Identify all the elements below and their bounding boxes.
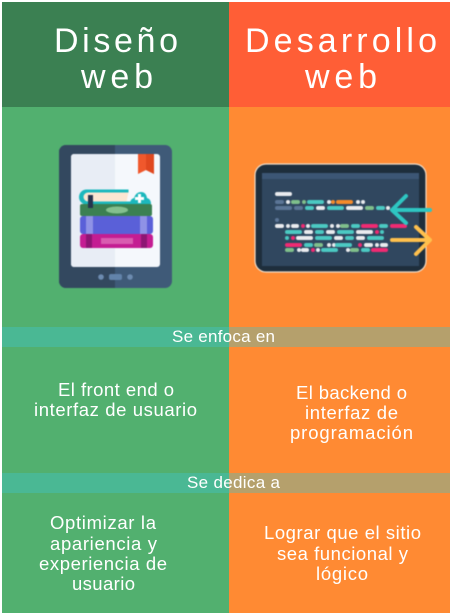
text: El front end [34,379,197,420]
text: El backend: programación [290,422,413,443]
arrow: left [392,196,430,223]
panel: left header [2,2,229,107]
heading: Diseño web: Diseño [54,22,178,60]
text: Optimizar: apariencia y [50,533,158,554]
heading: Desarrollo web: Desarrollo [245,22,437,60]
text: El backend [290,382,413,443]
heading: Desarrollo web: web [304,58,377,96]
panel: right column [229,107,450,613]
text: Lograr [264,522,421,584]
text: El front end: interfaz de usuario [34,399,197,420]
text: Optimizar: Optimizar la [50,512,157,533]
text: Lograr: lógico [316,563,368,584]
text: El front end: El front end o [58,379,174,400]
band: Se dedica a [2,473,450,493]
heading: Diseño web: web [80,58,153,96]
band: Se enfoca en: Se enfoca en [172,327,275,346]
band: Se enfoca en [2,327,450,347]
panel: left column [2,107,229,613]
text: Optimizar: experiencia de [39,553,167,574]
text: Lograr: Lograr que el sitio [264,522,421,543]
heading: Desarrollo web [245,22,437,96]
icon: tablet with books [59,145,172,288]
heading: Diseño web [54,22,178,96]
text: El backend: interfaz de [305,402,398,423]
text: Optimizar: usuario [72,573,135,594]
band: Se dedica a: Se dedica a [187,473,281,492]
text: Optimizar [39,512,167,594]
text: El backend: El backend o [296,382,407,403]
text: Lograr: sea funcional y [277,543,409,564]
arrow: right [392,227,430,254]
panel: right header [229,2,450,107]
icon: tablet with code and arrows [255,164,430,272]
